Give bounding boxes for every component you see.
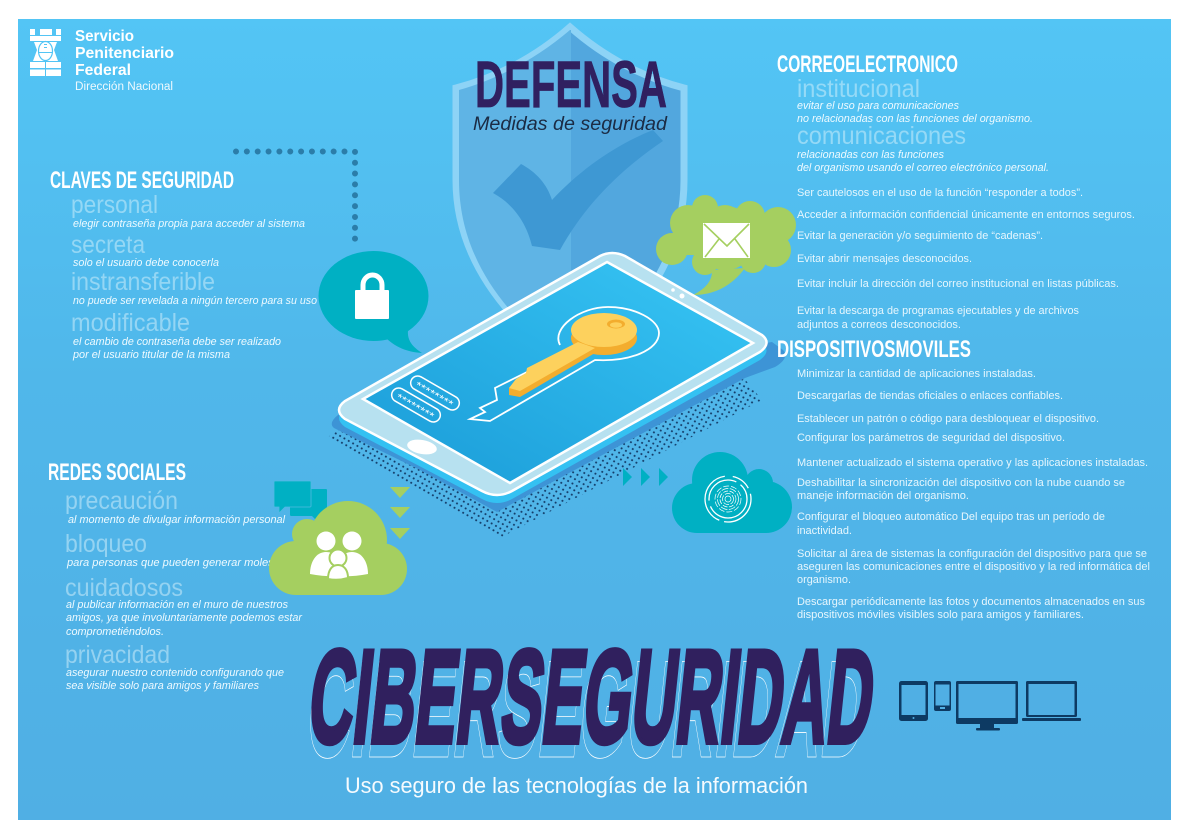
item: comunicaciones: del organismo usando el correo electrónico personal. bbox=[797, 162, 1049, 174]
list: correo recommendations: Evitar abrir mensajes desconocidos. bbox=[797, 253, 972, 265]
heading: claves: CLAVES DE SEGURIDAD bbox=[50, 167, 234, 194]
key outline bbox=[470, 307, 659, 421]
logo text: Servicio bbox=[75, 28, 134, 45]
item: privacidad: sea visible solo para amigos y familiares bbox=[66, 680, 259, 692]
panel: redes sociales bbox=[48, 459, 303, 692]
illustration: tablet with key bbox=[339, 253, 767, 503]
icon: tower crest bbox=[30, 29, 61, 76]
list: correo recommendations: adjuntos a correos desconocidos. bbox=[797, 319, 961, 331]
heading: DEFENSA bbox=[473, 47, 668, 135]
list: dispositivos recommendations: dispositivos móviles visibles solo para amigos y familiares. bbox=[797, 609, 1084, 621]
item: comunicaciones: comunicaciones bbox=[797, 122, 966, 150]
item: instransferible: instransferible bbox=[71, 268, 215, 296]
icon: monitor bbox=[956, 681, 1018, 730]
password fields: ******** bbox=[413, 380, 455, 410]
list: dispositivos recommendations: organismo. bbox=[797, 574, 851, 586]
item: privacidad: privacidad bbox=[65, 641, 170, 669]
password fields bbox=[389, 373, 462, 425]
icon: envelope bbox=[703, 223, 750, 258]
icon: fingerprint cloud bbox=[672, 452, 792, 533]
list: correo recommendations: Evitar la descarga de programas ejecutables y de archivos bbox=[797, 305, 1079, 317]
heading: dispositivos: DISPOSITIVOSMOVILES bbox=[777, 336, 971, 363]
list: dispositivos recommendations: Minimizar la cantidad de aplicaciones instaladas. bbox=[797, 368, 1036, 380]
list: dispositivos recommendations: Descargar periódicamente las fotos y documentos almacenados en sus bbox=[797, 596, 1145, 608]
halftone shadow bbox=[328, 377, 762, 538]
item: institucional: institucional bbox=[797, 75, 920, 103]
item: precaucion: al momento de divulgar información personal bbox=[68, 514, 286, 526]
item: bloqueo: para personas que pueden generar molestias bbox=[66, 557, 292, 569]
item: secreta: solo el usuario debe conocerla bbox=[73, 257, 219, 269]
item: precaucion bbox=[65, 487, 286, 526]
list: correo recommendations bbox=[797, 187, 1135, 331]
item: cuidadosos: al publicar información en el muro de nuestros bbox=[66, 599, 288, 611]
logo text: Penitenciario bbox=[75, 45, 174, 62]
item: instransferible: no puede ser revelada a ningún tercero para su uso bbox=[73, 295, 317, 307]
list: dispositivos recommendations: Configurar el bloqueo automático Del equipo tras un período de bbox=[797, 511, 1105, 523]
item: personal: elegir contraseña propia para acceder al sistema bbox=[73, 218, 305, 230]
item: cuidadosos bbox=[65, 574, 303, 638]
item: cuidadosos: cuidadosos bbox=[65, 574, 183, 602]
dotted connector bbox=[236, 152, 355, 249]
icon: phone bbox=[934, 681, 951, 711]
item: modificable: modificable bbox=[71, 309, 190, 337]
list: dispositivos recommendations: Configurar los parámetros de seguridad del dispositivo. bbox=[797, 432, 1065, 444]
subtitle: uso seguro: Uso seguro de las tecnologías de la información bbox=[345, 773, 808, 798]
logo text bbox=[75, 28, 174, 93]
list: correo recommendations: Ser cautelosos en el uso de la función “responder a todos”. bbox=[797, 187, 1083, 199]
panel: dispositivos moviles bbox=[777, 336, 1150, 621]
list: dispositivos recommendations: maneje información del organismo. bbox=[797, 490, 969, 502]
password fields: ******** bbox=[394, 392, 436, 422]
list: dispositivos recommendations bbox=[797, 368, 1150, 621]
item: personal bbox=[71, 191, 305, 230]
item: personal: personal bbox=[71, 191, 158, 219]
tablet side bbox=[339, 261, 767, 503]
item: modificable: por el usuario titular de la misma bbox=[72, 349, 230, 361]
item: precaucion: precaución bbox=[65, 487, 178, 515]
list: dispositivos recommendations: Solicitar al área de sistemas la configuración del dispositivo para que se bbox=[797, 548, 1147, 560]
list: dispositivos recommendations: aseguren las comunicaciones entre el dispositivo y la red informática del bbox=[797, 561, 1150, 573]
home button bbox=[406, 438, 438, 456]
item: modificable bbox=[71, 309, 281, 361]
icon: lock speech bubble bbox=[318, 251, 428, 353]
icon: key bbox=[509, 313, 637, 397]
item: bloqueo bbox=[65, 530, 292, 569]
icon: family bbox=[310, 532, 368, 580]
icon: padlock bbox=[355, 275, 389, 319]
list: correo recommendations: Evitar la generación y/o seguimiento de “cadenas”. bbox=[797, 230, 1043, 242]
logo: Servicio Penitenciario Federal bbox=[30, 28, 174, 93]
title: CIBERSEGURIDAD bbox=[301, 623, 882, 787]
icon: laptop bbox=[1022, 681, 1081, 721]
item: comunicaciones: relacionadas con las funciones bbox=[797, 149, 944, 161]
heading: redes: REDES SOCIALES bbox=[48, 459, 186, 486]
list: dispositivos recommendations: Establecer un patrón o código para desbloquear el dispositivo. bbox=[797, 413, 1099, 425]
item: secreta: secreta bbox=[71, 231, 145, 259]
logo text: Dirección Nacional bbox=[75, 81, 173, 93]
list: dispositivos recommendations: Descargarlas de tiendas oficiales o enlaces confiables. bbox=[797, 390, 1063, 402]
icon: family cloud bbox=[269, 501, 407, 595]
panel: claves de seguridad bbox=[50, 167, 317, 361]
list: correo recommendations: Evitar incluir la dirección del correo institucional en listas públicas. bbox=[797, 278, 1119, 290]
heading: DEFENSA: DEFENSA bbox=[475, 47, 667, 121]
list: dispositivos recommendations: Mantener actualizado el sistema operativo y las aplicaciones instaladas. bbox=[797, 457, 1148, 469]
icon: tablet bbox=[899, 681, 928, 721]
item: comunicaciones bbox=[797, 122, 1049, 174]
camera dots bbox=[671, 288, 684, 298]
item: institucional: no relacionadas con las funciones del organismo. bbox=[797, 113, 1033, 125]
icon: background shield with check bbox=[456, 27, 684, 318]
arrows: green triangles bbox=[390, 487, 410, 539]
list: correo recommendations: Acceder a información confidencial únicamente en entornos seguros. bbox=[797, 209, 1135, 221]
tablet screen bbox=[363, 262, 753, 483]
icons: devices bbox=[899, 681, 1081, 730]
item: privacidad bbox=[65, 641, 284, 692]
arrows: teal triangles bbox=[623, 468, 668, 486]
icon: fingerprint bbox=[705, 476, 751, 522]
icon: mail cloud bbox=[656, 195, 796, 295]
heading: correo: CORREOELECTRONICO bbox=[777, 51, 958, 78]
item: institucional: evitar el uso para comunicaciones bbox=[797, 100, 959, 112]
icon: check mark bbox=[493, 130, 663, 250]
list: dispositivos recommendations: Deshabilitar la sincronización del dispositivo con la nube cuando se bbox=[797, 477, 1125, 489]
item: cuidadosos: amigos, ya que involuntariamente podemos estar bbox=[66, 612, 303, 624]
item: privacidad: asegurar nuestro contenido configurando que bbox=[66, 667, 284, 679]
logo text: Federal bbox=[75, 62, 131, 79]
subtitle: Medidas de seguridad: Medidas de seguridad bbox=[473, 114, 668, 135]
item: institucional bbox=[797, 75, 1033, 125]
list: dispositivos recommendations: inactividad. bbox=[797, 525, 852, 537]
item: bloqueo: bloqueo bbox=[65, 530, 147, 558]
item: cuidadosos: comprometiéndolos. bbox=[66, 626, 164, 638]
icon: chat bubbles bbox=[274, 481, 327, 523]
tablet cast shadow bbox=[332, 342, 785, 512]
item: instransferible bbox=[71, 268, 317, 307]
item: secreta bbox=[71, 231, 219, 269]
item: modificable: el cambio de contraseña debe ser realizado bbox=[73, 336, 281, 348]
panel: correo electronico bbox=[777, 51, 1135, 331]
tablet bezel bbox=[339, 253, 767, 495]
